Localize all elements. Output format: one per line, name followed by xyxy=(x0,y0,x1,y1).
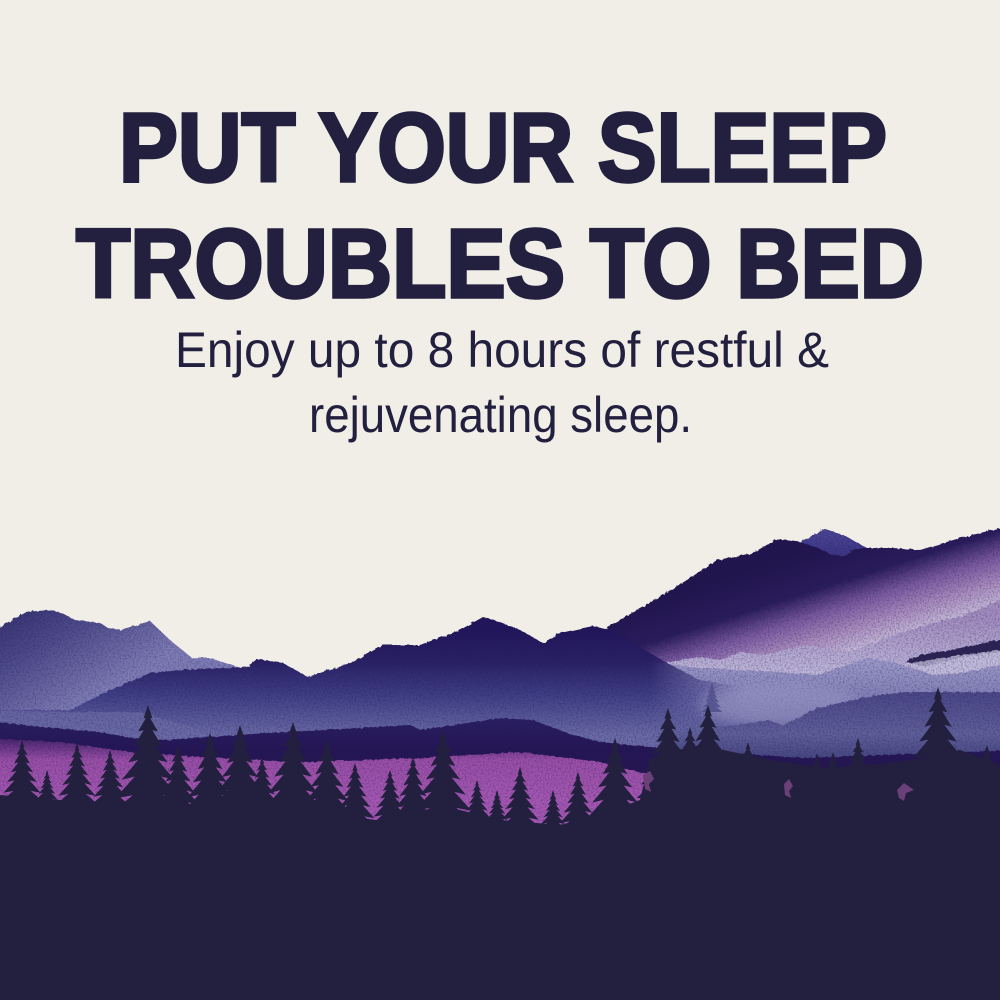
title: TROUBLES TO BED xyxy=(76,209,924,318)
title xyxy=(76,93,924,318)
far left mountain xyxy=(0,610,300,725)
forest floor xyxy=(0,745,1000,1000)
subtitle xyxy=(175,322,829,443)
title: PUT YOUR SLEEP xyxy=(119,93,887,202)
mountain peak xyxy=(800,529,867,556)
lower right hill xyxy=(660,692,1000,780)
left lower mist band xyxy=(0,710,200,745)
faint tree in mist xyxy=(702,682,722,712)
far right purple mountain xyxy=(607,524,1000,700)
mist between ridges xyxy=(700,683,860,727)
trees xyxy=(0,687,1000,833)
subtitle: Enjoy up to 8 hours of restful & xyxy=(175,322,829,378)
grey blue hills xyxy=(640,658,1000,770)
forest silhouette xyxy=(0,687,1000,1000)
dark front band xyxy=(0,718,1000,800)
watercolor mountain landscape xyxy=(0,524,1000,840)
light misty hills xyxy=(667,590,1000,700)
pale mist hill xyxy=(905,648,1000,676)
magenta field xyxy=(0,738,650,840)
magenta glimpses between right trees xyxy=(643,771,914,801)
distant dark treeline xyxy=(905,638,1000,666)
subtitle: rejuvenating sleep. xyxy=(309,387,692,443)
middle indigo ridge xyxy=(0,616,733,748)
